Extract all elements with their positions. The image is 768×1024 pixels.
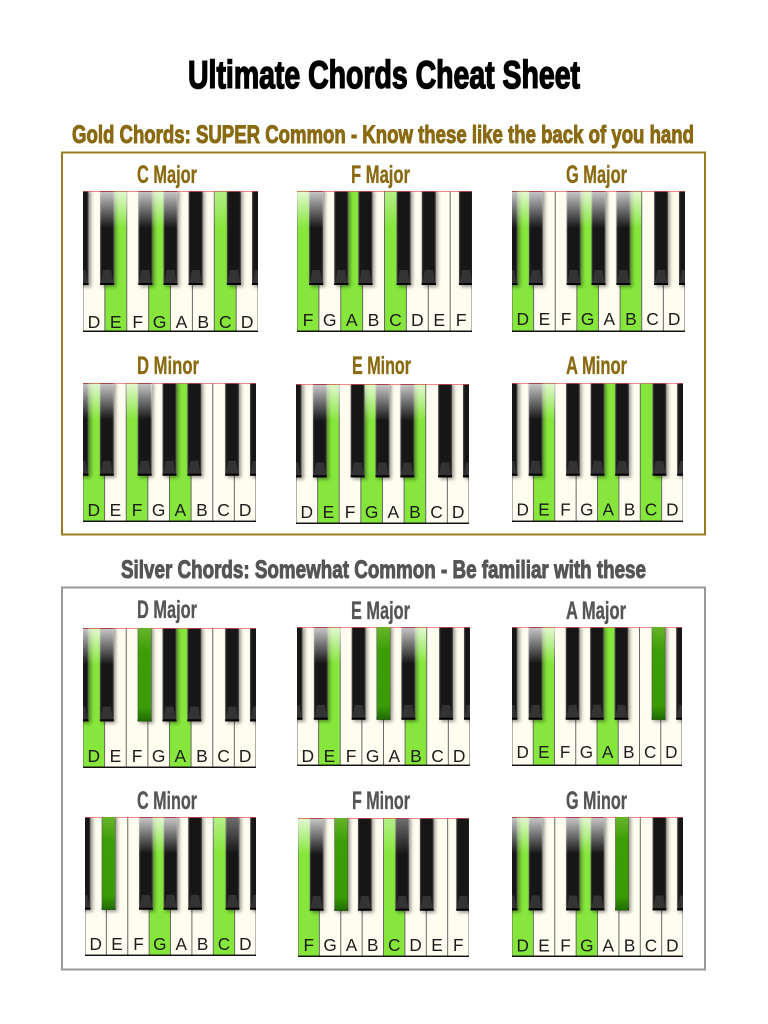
chord title: A Minor: A Minor	[566, 352, 627, 380]
chord title: F Minor: F Minor	[352, 787, 410, 815]
keyboard: F Major	[297, 191, 475, 332]
chord title: G Minor: G Minor	[566, 787, 627, 815]
keyboard: A Minor: DEFGABCD	[517, 500, 679, 520]
keyboard: C Minor	[77, 817, 266, 956]
keyboard: E Major: DEFGABCD	[302, 746, 465, 766]
keyboard: C Minor: DEFGABCD	[90, 934, 252, 954]
chord title: E Major: E Major	[351, 597, 410, 625]
chord title: C Major: C Major	[137, 161, 197, 189]
chord title: C Minor: C Minor	[137, 787, 197, 815]
keyboard: F Major: FGABCDEF	[303, 310, 467, 330]
keyboard: G Major	[504, 191, 695, 332]
keyboard: D Major: DEFGABCD	[88, 746, 251, 766]
keyboard: G Minor: DEFGABCD	[517, 936, 679, 956]
keyboard: C Major	[74, 191, 268, 332]
title: Ultimate Chords Cheat Sheet	[188, 54, 580, 97]
panel: gold chords	[62, 152, 705, 534]
keyboard: C Major: DEFGABCD	[88, 312, 253, 332]
keyboard: A Minor	[504, 383, 693, 522]
chord title: F Major: F Major	[351, 161, 410, 189]
chord title: A Major: A Major	[566, 597, 626, 625]
keyboard: G Minor	[504, 817, 693, 957]
keyboard: A Major	[504, 627, 692, 766]
chord title: E Minor: E Minor	[352, 352, 411, 380]
keyboard: E Major	[289, 627, 480, 766]
keyboard: D Minor: DEFGABCD	[88, 500, 251, 520]
keyboard: F Minor	[298, 818, 472, 957]
keyboard: G Major: DEFGABCD	[517, 309, 680, 329]
keyboard: A Major: DEFGABCD	[516, 742, 678, 762]
keyboard: E Minor: DEFGABCD	[301, 502, 464, 522]
chord title: G Major: G Major	[566, 161, 627, 189]
keyboard: E Minor	[288, 384, 479, 524]
chord title: D Minor: D Minor	[137, 352, 199, 380]
keyboard: F Minor: FGABCDEF	[303, 935, 464, 955]
keyboard: D Major	[75, 628, 266, 768]
chord title: D Major: D Major	[137, 596, 197, 624]
panel: silver chords	[62, 588, 705, 970]
keyboard: D Minor	[75, 383, 266, 522]
